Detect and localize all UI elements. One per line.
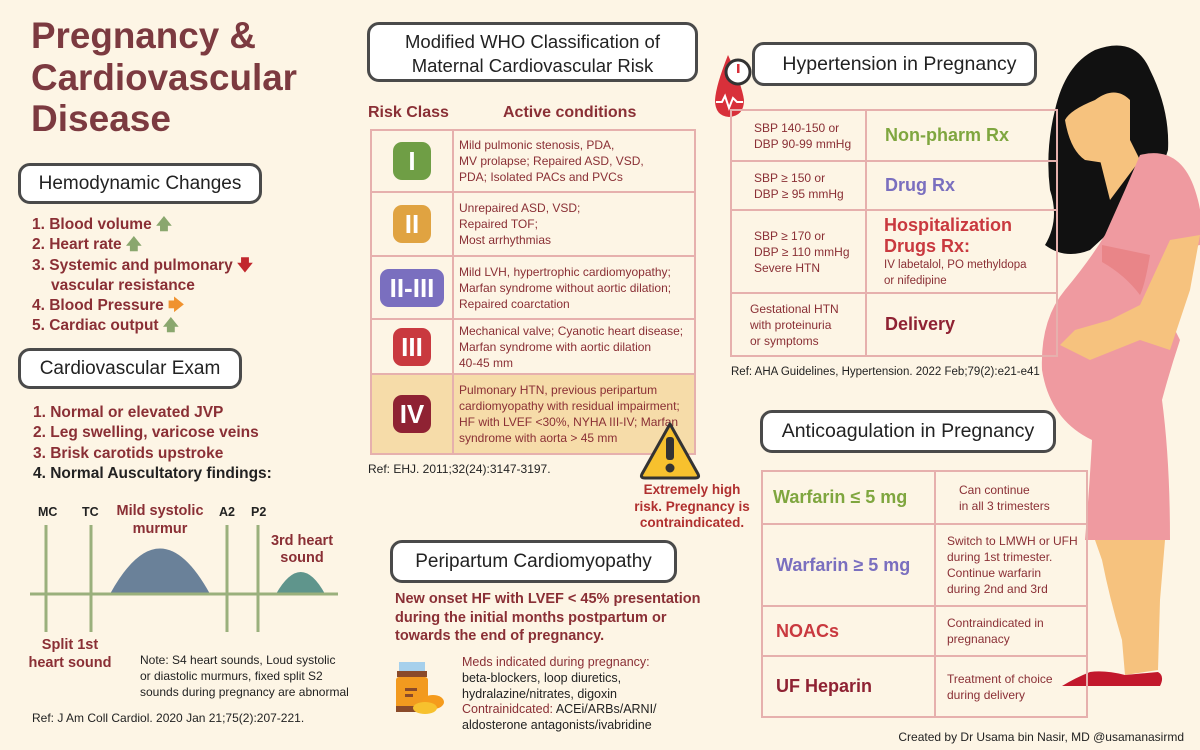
table: hypertension: SBP ≥ 150 or [754, 170, 825, 184]
table headers: Risk Class [368, 104, 449, 121]
heading: peripartum [390, 540, 677, 583]
table: WHO risk: Mild LVH, hypertrophic cardiomyopathy; [459, 264, 671, 278]
table: hypertension: Non-pharm Rx [885, 125, 1009, 145]
table: WHO risk: Pulmonary HTN, previous peripartum [459, 383, 657, 397]
table: hypertension: or symptoms [750, 334, 819, 348]
list: hemodynamic changes: 5. Cardiac output 🡅 [32, 317, 179, 334]
table: WHO risk: syndrome with aorta > 45 mm [459, 431, 617, 445]
table: WHO risk: Mild pulmonic stenosis, PDA, [459, 138, 614, 152]
chart: heart sounds diagram: Split 1st [42, 637, 98, 653]
table: hypertension: DBP ≥ 95 mmHg [754, 186, 844, 200]
table: hypertension: Drug Rx [885, 175, 955, 195]
heading: hemodynamic changes: Hemodynamic Changes [39, 173, 241, 194]
title: Disease [31, 98, 171, 139]
chart: heart sounds diagram: 3rd heart [271, 533, 333, 549]
text: peripartum definition: during the initial months postpartum or [395, 610, 666, 626]
list: hemodynamic changes: vascular resistance [51, 277, 195, 294]
text: meds: beta-blockers, loop diuretics, [462, 671, 621, 685]
list: hemodynamic changes: 1. Blood volume 🡅 [32, 216, 172, 233]
icon: warning [640, 422, 700, 480]
table: WHO risk: Marfan syndrome without aortic dilation; [459, 280, 671, 294]
list: hemodynamic changes: 3. Systemic and pulmonary 🡇 [32, 257, 253, 274]
table: WHO risk: Most arrhythmias [459, 233, 551, 247]
table: anticoagulation: NOACs [776, 620, 839, 640]
table: anticoagulation: Can continue [959, 482, 1030, 496]
table: anticoagulation: Switch to LMWH or UFH [947, 534, 1078, 548]
table: anticoagulation: UF Heparin [776, 676, 872, 696]
chart: heart sounds diagram: MC [38, 505, 57, 519]
note: sounds during pregnancy are abnormal [140, 685, 349, 699]
table: anticoagulation [761, 470, 1088, 718]
table: anticoagulation: Treatment of choice [947, 672, 1053, 686]
text: Active conditions [503, 104, 636, 121]
list: cardiovascular exam: 4. Normal Auscultatory findings: [33, 465, 272, 482]
heading: hemodynamic changes [18, 163, 262, 204]
table: hypertension: IV labetalol, PO methyldopa [884, 258, 1027, 270]
table: anticoagulation: during delivery [947, 688, 1025, 702]
text: meds: Contrainidcated: ACEi/ARBs/ARNI/ [462, 702, 657, 716]
title [31, 15, 297, 139]
table: hypertension: SBP ≥ 170 or [754, 228, 825, 242]
text: peripartum definition: towards the end of pregnancy. [395, 628, 604, 644]
table: WHO risk: Mechanical valve; Cyanotic heart disease; [459, 324, 683, 338]
heading: anticoagulation [760, 410, 1056, 453]
icon: blood pressure drop [715, 55, 752, 117]
chart: heart sounds diagram: P2 [251, 505, 266, 519]
table: anticoagulation: during 2nd and 3rd [947, 582, 1048, 596]
woman illustration [1042, 46, 1200, 686]
chart: heart sounds diagram: murmur [133, 521, 188, 537]
chart: heart sounds diagram: A2 [219, 505, 235, 519]
table: hypertension [730, 109, 1058, 357]
table: WHO risk: III [401, 332, 423, 362]
table: anticoagulation: in all 3 trimesters [959, 498, 1050, 512]
text: meds: hydralazine/nitrates, digoxin [462, 687, 617, 701]
chart: heart sounds diagram: heart sound [29, 655, 111, 671]
table: WHO risk: Repaired TOF; [459, 217, 538, 231]
note [140, 653, 349, 699]
note: Note: S4 heart sounds, Loud systolic [140, 653, 335, 667]
credit: Created by Dr Usama bin Nasir, MD @usamanasirmd [898, 730, 1184, 744]
table: hypertension: with proteinuria [750, 318, 831, 332]
text: meds [462, 655, 657, 732]
chart: heart sounds diagram: TC [82, 505, 99, 519]
table: WHO risk: HF with LVEF <30%, NYHA III-IV; Marfan [459, 415, 678, 429]
table: hypertension: or nifedipine [884, 274, 947, 286]
heading: hypertension [752, 42, 1037, 86]
chart: heart sounds diagram [29, 503, 338, 671]
table: WHO risk: cardiomyopathy with residual impairment; [459, 399, 680, 413]
ref: Ref: J Am Coll Cardiol. 2020 Jan 21;75(2):207-221. [32, 711, 304, 725]
heading: WHO classification: Modified WHO Classification of [405, 31, 660, 52]
table: hypertension: Severe HTN [754, 260, 820, 274]
list: cardiovascular exam: 2. Leg swelling, varicose veins [33, 424, 259, 441]
list: hemodynamic changes [32, 216, 253, 334]
text: meds: Meds indicated during pregnancy: [462, 655, 650, 669]
table: WHO risk: Marfan syndrome with aortic dilation [459, 340, 651, 354]
ref: AHA: Ref: AHA Guidelines, Hypertension. 2022 Feb;79(2):e21-e41 [731, 366, 1040, 378]
table: WHO risk: MV prolapse; Repaired ASD, VSD, [459, 154, 644, 168]
heading: anticoagulation: Anticoagulation in Pregnancy [782, 420, 1034, 442]
icon: medication bottle [396, 662, 444, 714]
table: anticoagulation: Contraindicated in [947, 616, 1044, 630]
text: peripartum definition: New onset HF with LVEF < 45% presentation [395, 591, 700, 607]
table: anticoagulation: pregnanacy [947, 632, 1010, 646]
table: WHO risk: II [405, 209, 419, 239]
table: hypertension: DBP ≥ 110 mmHg [754, 244, 850, 258]
table: anticoagulation: Warfarin ≥ 5 mg [776, 554, 910, 574]
table: hypertension: DBP 90-99 mmHg [754, 136, 851, 150]
heading: WHO classification [367, 22, 698, 82]
table: hypertension: Gestational HTN [750, 302, 839, 316]
title: Cardiovascular [31, 57, 297, 98]
table: WHO risk: Repaired coarctation [459, 296, 570, 310]
table: hypertension: Drugs Rx: [884, 236, 970, 256]
list: cardiovascular exam [33, 404, 272, 482]
heading: cardiovascular exam: Cardiovascular Exam [40, 358, 220, 379]
table: anticoagulation: Warfarin ≤ 5 mg [773, 487, 907, 507]
callout: extremely high risk: Extremely high risk. Pregnancy is contraindicated. [634, 482, 750, 530]
list: cardiovascular exam: 3. Brisk carotids upstroke [33, 445, 223, 462]
table: WHO risk: PDA; Isolated PACs and PVCs [459, 170, 623, 184]
chart: heart sounds diagram: Mild systolic [116, 503, 204, 519]
chart: heart sounds diagram: sound [280, 550, 324, 566]
table: hypertension: Hospitalization [884, 214, 1012, 234]
ref: EHJ: Ref: EHJ. 2011;32(24):3147-3197. [368, 462, 551, 476]
list: cardiovascular exam: 1. Normal or elevated JVP [33, 404, 223, 421]
heading: cardiovascular exam [18, 348, 242, 389]
title: Pregnancy & [31, 15, 256, 56]
list: hemodynamic changes: 4. Blood Pressure 🡆 [32, 297, 184, 314]
table: WHO risk: IV [400, 399, 424, 429]
text: meds: aldosterone antagonists/ivabridine [462, 718, 652, 732]
heading: peripartum: Peripartum Cardiomyopathy [415, 551, 652, 572]
table: anticoagulation: Continue warfarin [947, 566, 1041, 580]
table: WHO risk [370, 129, 696, 455]
text: peripartum definition [395, 591, 700, 644]
heading: hypertension: Hypertension in Pregnancy [782, 53, 1017, 75]
table: WHO risk: Unrepaired ASD, VSD; [459, 201, 580, 215]
table: WHO risk: 40-45 mm [459, 356, 513, 370]
table: hypertension: Delivery [885, 314, 955, 334]
table: WHO risk: I [408, 146, 416, 176]
heading: WHO classification: Maternal Cardiovascular Risk [412, 55, 653, 76]
table: anticoagulation: during 1st trimester. [947, 550, 1052, 564]
note: or diastolic murmurs, fixed split S2 [140, 669, 323, 683]
table: WHO risk: II-III [390, 272, 434, 302]
list: hemodynamic changes: 2. Heart rate 🡅 [32, 236, 142, 253]
table: hypertension: SBP 140-150 or [754, 120, 839, 134]
